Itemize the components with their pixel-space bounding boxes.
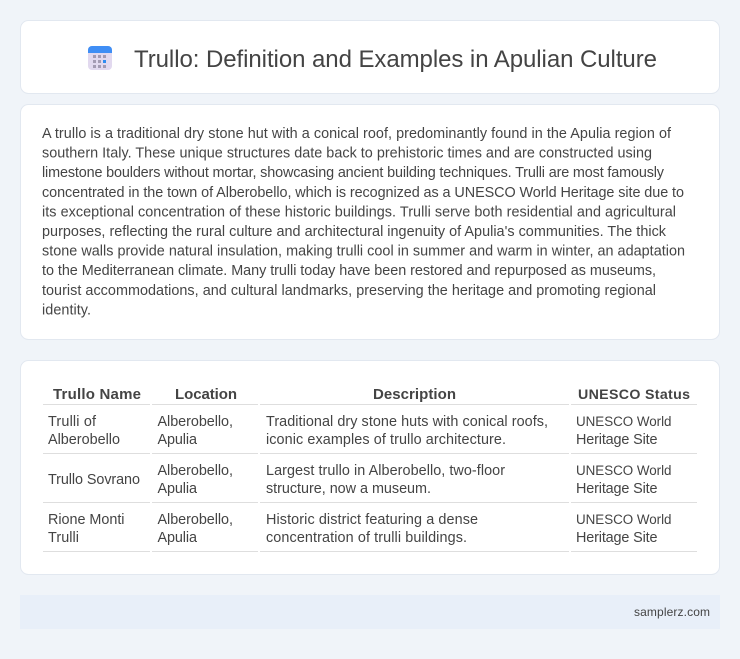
panel: table card [20, 360, 720, 574]
panel: description [20, 104, 720, 340]
text block: trullo description: stone walls provide natural insulation, making trulli cool in summer and warm in winter, an adaptation [42, 244, 685, 260]
text block: trullo description: purposes, reflecting the rural culture and architectural ingenuity of Apulia's communities. The thick [42, 224, 667, 240]
text block: trullo description: its exceptional concentration of these historic buildings. Trulli serve both residential and agricultural [42, 204, 676, 220]
table row: Rione Monti Trulli [43, 512, 697, 552]
table row: Trulli of Alberobello: UNESCO World [576, 414, 672, 429]
text block: trullo description: identity. [42, 302, 91, 318]
icon: calendar [88, 46, 112, 70]
table row: Trullo Sovrano: Largest trullo in Alberobello, two-floor [266, 463, 505, 479]
table row: Trullo Sovrano: Heritage Site [576, 481, 658, 497]
table header: Description [373, 386, 456, 403]
table row: Rione Monti Trulli: Trulli [48, 530, 79, 546]
table row: Rione Monti Trulli: Alberobello, [158, 512, 233, 528]
table header: Location [175, 386, 237, 403]
table row: Trulli of Alberobello: Traditional dry stone huts with conical roofs, [266, 414, 548, 430]
table row: Trullo Sovrano: Alberobello, [158, 463, 233, 479]
table row: Rione Monti Trulli: concentration of trulli buildings. [266, 530, 467, 546]
table row: Rione Monti Trulli: Rione Monti [48, 512, 124, 528]
table row: Trullo Sovrano: structure, now a museum. [266, 481, 431, 497]
table row: Trulli of Alberobello: Apulia [158, 432, 197, 448]
table row: Rione Monti Trulli: Heritage Site [576, 530, 658, 546]
table row: Trulli of Alberobello: iconic examples of trullo architecture. [266, 432, 506, 448]
text block: trullo description: limestone boulders without mortar, showcasing ancient building techniques. Trulli are most famously [42, 165, 665, 181]
text block: trullo description: A trullo is a traditional dry stone hut with a conical roof, predominantly found in the Apulia region of [42, 126, 672, 142]
table row: Rione Monti Trulli: Historic district featuring a dense [266, 512, 478, 528]
table row: Rione Monti Trulli: Apulia [158, 530, 197, 546]
table row: Trulli of Alberobello: Heritage Site [576, 432, 658, 448]
table row: Trullo Sovrano: Apulia [158, 481, 197, 497]
text block: trullo description: tourist accommodations, and cultural landmarks, preserving the heritage and promoting regional [42, 283, 656, 299]
table row: Trulli of Alberobello: Trulli of [48, 414, 97, 430]
table row: Trullo Sovrano [43, 463, 697, 503]
table row: Trulli of Alberobello: Alberobello [48, 432, 120, 448]
text block: trullo description: southern Italy. These unique structures date back to prehistoric times and are constructed using [42, 146, 652, 162]
table row: Trullo Sovrano: UNESCO World [576, 463, 672, 478]
table header: UNESCO Status [578, 387, 690, 403]
text block: trullo description [42, 126, 685, 318]
text block: trullo description: to the Mediterranean climate. Many trulli today have been restored and repurposed as museums, [42, 263, 656, 279]
panel: title card [20, 20, 720, 94]
table row: Trullo Sovrano: Trullo Sovrano [48, 472, 140, 488]
footer text: samplerz.com: samplerz.com [634, 605, 710, 619]
table row: Trulli of Alberobello: Alberobello, [158, 414, 233, 430]
table row: Trulli of Alberobello [43, 414, 697, 454]
text block: trullo description: concentrated in the town of Alberobello, which is recognized as a UNESCO World Heritage site due to [42, 185, 684, 201]
table row: Rione Monti Trulli: UNESCO World [576, 512, 672, 527]
table header: Trullo Name [53, 386, 141, 403]
footer bar [20, 595, 720, 629]
title: Trullo: Definition and Examples in Apulian Culture [134, 46, 657, 73]
table header [43, 386, 697, 405]
